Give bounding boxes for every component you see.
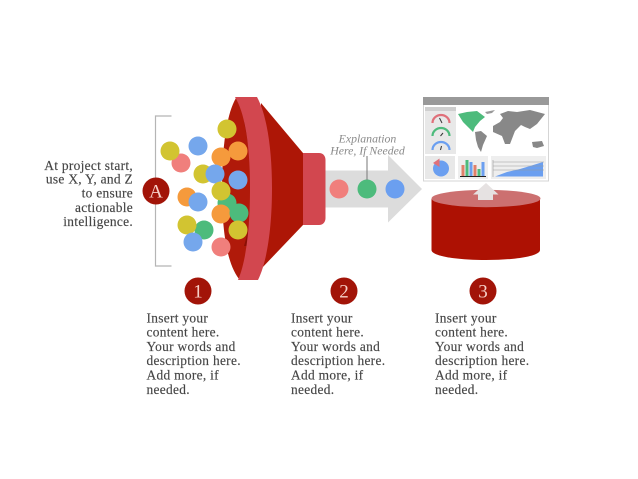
side note text: to ensure <box>82 186 133 200</box>
up arrow <box>473 183 498 200</box>
bracket <box>156 116 172 266</box>
badge A <box>142 178 170 204</box>
gauge panel <box>425 107 456 154</box>
step 3 text: Add more, if <box>435 368 508 382</box>
step 1 badge: 1 <box>193 282 203 302</box>
side note text <box>44 158 133 229</box>
step 2 badge <box>330 278 358 304</box>
step 1 text: needed. <box>146 382 190 397</box>
step 3 text: needed. <box>435 382 478 397</box>
pie chart panel <box>425 156 455 179</box>
side note text: At project start, <box>44 158 133 173</box>
funnel rim <box>235 97 272 280</box>
explanation label: Explanation <box>338 132 396 146</box>
step 2 text: Your words and <box>291 339 380 354</box>
step 3 badge: 3 <box>478 282 488 302</box>
step 3 text <box>435 310 529 397</box>
funnel <box>222 97 326 280</box>
funnel opening <box>222 98 256 279</box>
step 2 text: Add more, if <box>291 368 364 382</box>
world map <box>458 110 545 152</box>
step 3 text: Insert your <box>435 310 497 326</box>
step 3 text: Your words and <box>435 339 524 354</box>
step 1 badge <box>184 278 212 304</box>
explanation label <box>329 132 405 180</box>
area chart panel <box>491 156 546 179</box>
step 1 text: Add more, if <box>146 368 219 382</box>
side note text: actionable <box>75 200 133 215</box>
cylinder <box>432 190 540 260</box>
dashboard <box>423 97 549 181</box>
bar chart panel <box>458 156 488 179</box>
step 3 text: description here. <box>435 353 529 368</box>
colored balls <box>160 120 248 256</box>
funnel cone <box>261 103 303 269</box>
side note text: use X, Y, and Z <box>46 172 133 186</box>
funnel neck <box>298 153 326 225</box>
step 1 text: description here. <box>146 353 241 368</box>
step 1 text <box>146 310 241 397</box>
step 2 badge: 2 <box>339 282 349 302</box>
step 3 text: content here. <box>435 324 508 340</box>
step 2 text <box>291 310 385 397</box>
step 2 text: description here. <box>291 353 385 368</box>
step 1 text: Your words and <box>146 339 236 354</box>
arrow: gray flow arrow <box>320 155 422 222</box>
explanation label: Here, If Needed <box>329 144 405 158</box>
badge A: A <box>149 182 163 202</box>
step 1 text: content here. <box>146 324 220 340</box>
step 2 text: needed. <box>291 382 334 397</box>
side note text: intelligence. <box>63 214 133 229</box>
step 1 text: Insert your <box>146 310 208 326</box>
step 2 text: Insert your <box>291 310 353 326</box>
step 3 badge <box>470 278 496 304</box>
arrow circles <box>330 180 404 198</box>
step 2 text: content here. <box>291 324 364 340</box>
